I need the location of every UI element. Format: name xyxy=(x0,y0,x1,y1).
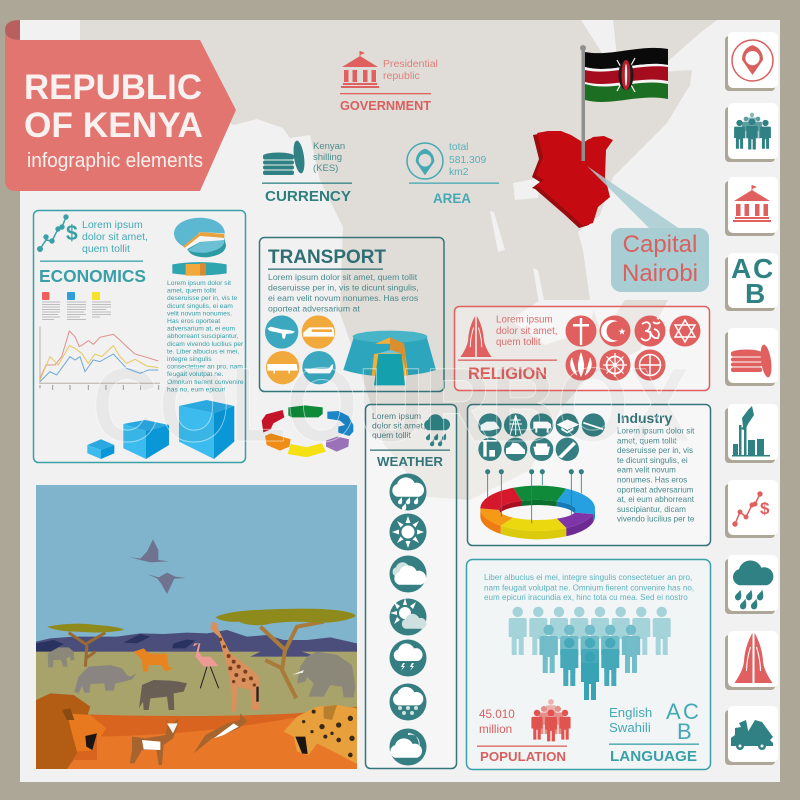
icon: cloudy xyxy=(390,556,426,592)
icon: sun and cloud xyxy=(390,598,426,636)
chart legend xyxy=(42,292,111,320)
industry paragraph: vivendo lucilius per te xyxy=(617,515,695,524)
economics text: dolor sit amet, xyxy=(82,231,148,243)
industry paragraph: deseruisse per in, vis xyxy=(617,446,693,455)
ground xyxy=(36,652,357,718)
rhino xyxy=(74,665,136,693)
icon: rain xyxy=(390,474,426,510)
area heading: AREA xyxy=(433,191,471,206)
economics paragraph: has no, eum epicuri xyxy=(167,386,226,393)
mountains xyxy=(36,630,357,653)
icon: population group xyxy=(531,699,571,741)
economics paragraph: velit novum nonumes. xyxy=(167,310,232,317)
religion text: quem tollit xyxy=(496,337,541,348)
flamingo xyxy=(193,643,219,688)
transport paragraph: oporteat adversarium at xyxy=(268,304,360,314)
weather text: quem tollit xyxy=(372,430,411,440)
weather heading: WEATHER xyxy=(377,454,444,469)
gazelle standing xyxy=(130,718,179,765)
economics paragraph: consectetuer an pro, nam xyxy=(167,364,243,371)
icon: government building xyxy=(341,51,379,88)
icon: storm xyxy=(390,640,426,676)
icon: ship xyxy=(302,351,336,384)
capital callout xyxy=(587,166,709,292)
religion text: Lorem ipsum xyxy=(496,314,553,326)
lion xyxy=(36,693,106,769)
population figure: 45.010 xyxy=(479,708,515,721)
side icon: coins xyxy=(725,328,778,386)
industry paragraph: te dicunt singulis, ei xyxy=(617,456,688,465)
leopard xyxy=(284,705,357,764)
population heading: POPULATION xyxy=(480,749,566,764)
government block xyxy=(340,51,438,113)
side icon: rain xyxy=(725,555,778,614)
icon: plane xyxy=(265,315,298,349)
stadium chart xyxy=(343,331,436,385)
transport heading: TRANSPORT xyxy=(268,247,386,268)
icon: snow xyxy=(390,684,426,720)
economics heading: ECONOMICS xyxy=(39,266,146,286)
economics paragraph: abhorreant suscipiantur, xyxy=(167,333,239,340)
economics text: Lorem ipsum xyxy=(82,219,143,231)
economics paragraph: integre singulis xyxy=(167,356,212,363)
icon: bus xyxy=(302,315,335,349)
icon: sun xyxy=(390,514,426,550)
icon: rain cloud xyxy=(424,414,450,446)
currency heading: CURRENCY xyxy=(265,188,351,205)
economics paragraph: dicam vivendo lucilius per xyxy=(167,341,244,348)
Kenya flag xyxy=(580,45,668,161)
transport paragraph: ei eam velit novum nonumes. Has eros xyxy=(268,293,419,303)
title text: REPUBLIC xyxy=(24,68,202,107)
religion text: dolor sit amet, xyxy=(496,326,558,337)
economics text: quem tollit xyxy=(82,243,130,255)
line chart xyxy=(40,327,160,390)
side icon: industry xyxy=(725,404,778,463)
currency text: (KES) xyxy=(313,163,338,174)
industry paragraph: Lorem ipsum dolor sit xyxy=(617,426,694,436)
languages text: English xyxy=(609,705,652,720)
weather text: dolor sit amet, xyxy=(372,420,425,430)
currency text: Kenyan xyxy=(313,141,345,152)
savanna illustration xyxy=(36,485,357,769)
icon: letters: B xyxy=(677,719,692,744)
government heading: GOVERNMENT xyxy=(340,99,431,113)
currency text: shilling xyxy=(313,152,342,163)
title text line two: OF KENYA xyxy=(24,106,203,145)
industry heading: Industry xyxy=(617,410,672,426)
side icon: language: A xyxy=(731,253,751,284)
area text: 581.309 xyxy=(449,155,486,166)
side icon: location xyxy=(725,32,778,91)
icon: growth chart: $ xyxy=(66,222,78,245)
exploded ring chart xyxy=(262,405,353,457)
title banner xyxy=(5,20,236,191)
icon: night cloud xyxy=(390,728,426,766)
industry icons row xyxy=(478,413,605,461)
capital callout: Nairobi xyxy=(622,260,698,287)
economics paragraph: feugait volutpat ne. xyxy=(167,371,224,378)
buffalo xyxy=(139,680,187,710)
economics paragraph: adversarium at, ei eum xyxy=(167,326,235,333)
large tree xyxy=(215,609,355,698)
icon: praying hands xyxy=(460,316,492,357)
big elephant xyxy=(297,652,355,697)
area text: km2 xyxy=(449,167,469,178)
icon: coins xyxy=(263,140,306,175)
economics paragraph: deseruisse per in, vis te xyxy=(167,295,238,302)
small elephant xyxy=(48,647,74,667)
ring chart pointers xyxy=(485,469,583,523)
3D ring chart xyxy=(480,486,595,539)
currency block xyxy=(262,140,352,205)
icon: train xyxy=(266,351,299,384)
people pyramid xyxy=(509,607,671,700)
capital callout: Capital xyxy=(623,231,697,258)
small tree xyxy=(47,624,124,667)
icon: letters: A xyxy=(666,699,681,724)
population paragraph: nam feugait volutpat ne. Omnium fierent convenire has no, xyxy=(484,584,694,592)
panel: religion xyxy=(454,306,710,390)
economics paragraph: Omnium fierent convenire xyxy=(167,379,244,386)
transport paragraph: deseruisse per in, vis te dicunt singulis, xyxy=(268,283,419,293)
industry paragraph: oporteat adversarium xyxy=(617,485,694,494)
Kenya 3D map xyxy=(532,131,613,228)
panel: population and language xyxy=(466,560,710,770)
side icon: truck xyxy=(725,706,778,765)
birds xyxy=(130,539,186,594)
panel: transport xyxy=(260,238,444,392)
panel: weather xyxy=(366,404,456,768)
side icon: language: C xyxy=(753,253,773,284)
panel: economics xyxy=(34,210,246,462)
economics paragraph: te. Liber albucius ei mei, xyxy=(167,348,239,355)
economics paragraph: Lorem ipsum dolor sit xyxy=(167,280,231,287)
languages text: Swahili xyxy=(609,720,651,735)
area text: total xyxy=(449,142,468,153)
side icon: economy chart: $ xyxy=(760,499,770,518)
side icon: people xyxy=(725,103,778,162)
icon: area pin xyxy=(407,143,443,179)
icons: religious symbols xyxy=(566,316,700,380)
lioness xyxy=(134,648,173,672)
industry paragraph: at, ei eum abhorreant xyxy=(617,495,695,504)
language heading: LANGUAGE xyxy=(610,748,697,765)
industry paragraph: eam velit novum xyxy=(617,466,676,475)
panel: industry xyxy=(468,404,710,546)
population figure: million xyxy=(479,723,512,736)
economics paragraph: amet, quem tollit xyxy=(167,288,216,295)
pie chart xyxy=(172,218,227,276)
subtitle: infographic elements xyxy=(27,150,203,172)
population paragraph: Liber albucius ei mei, integre singulis consectetuer an pro, xyxy=(484,573,692,582)
government text: Presidential xyxy=(383,58,438,70)
side icon: praying hands xyxy=(725,631,778,690)
industry paragraph: amet, quem tollit xyxy=(617,436,677,446)
transport icons and stadium chart xyxy=(265,315,436,385)
government text: republic xyxy=(383,70,420,82)
red earth xyxy=(36,707,357,769)
economics paragraph: Has eros oporteat xyxy=(167,318,220,325)
side icon: government xyxy=(725,177,778,236)
side icon: economy chart xyxy=(725,480,778,538)
3D cube bars xyxy=(87,400,234,459)
icon: growth chart xyxy=(37,214,78,252)
weather text: Lorem ipsum xyxy=(372,411,421,421)
economics paragraph: dicunt singulis, ei eam xyxy=(167,303,233,310)
transport paragraph: Lorem ipsum dolor sit amet, quem tollit xyxy=(268,272,417,282)
side icon: language xyxy=(725,253,778,311)
area block xyxy=(407,142,499,206)
industry paragraph: nonumes. Has eros xyxy=(617,476,687,485)
religion heading: RELIGION xyxy=(468,365,547,383)
industry paragraph: suscipiantur, dicam xyxy=(617,505,686,514)
population paragraph: eum epicuri iracundia ex, hinc tota cu mea. Sed ei nostro xyxy=(484,593,688,602)
watermark: COLOURBOX xyxy=(92,347,690,464)
gazelle leaping xyxy=(194,713,247,753)
side icon: language: B xyxy=(745,278,765,309)
bar band xyxy=(172,262,227,275)
giraffe xyxy=(210,622,260,712)
icon: letters: C xyxy=(683,699,699,724)
